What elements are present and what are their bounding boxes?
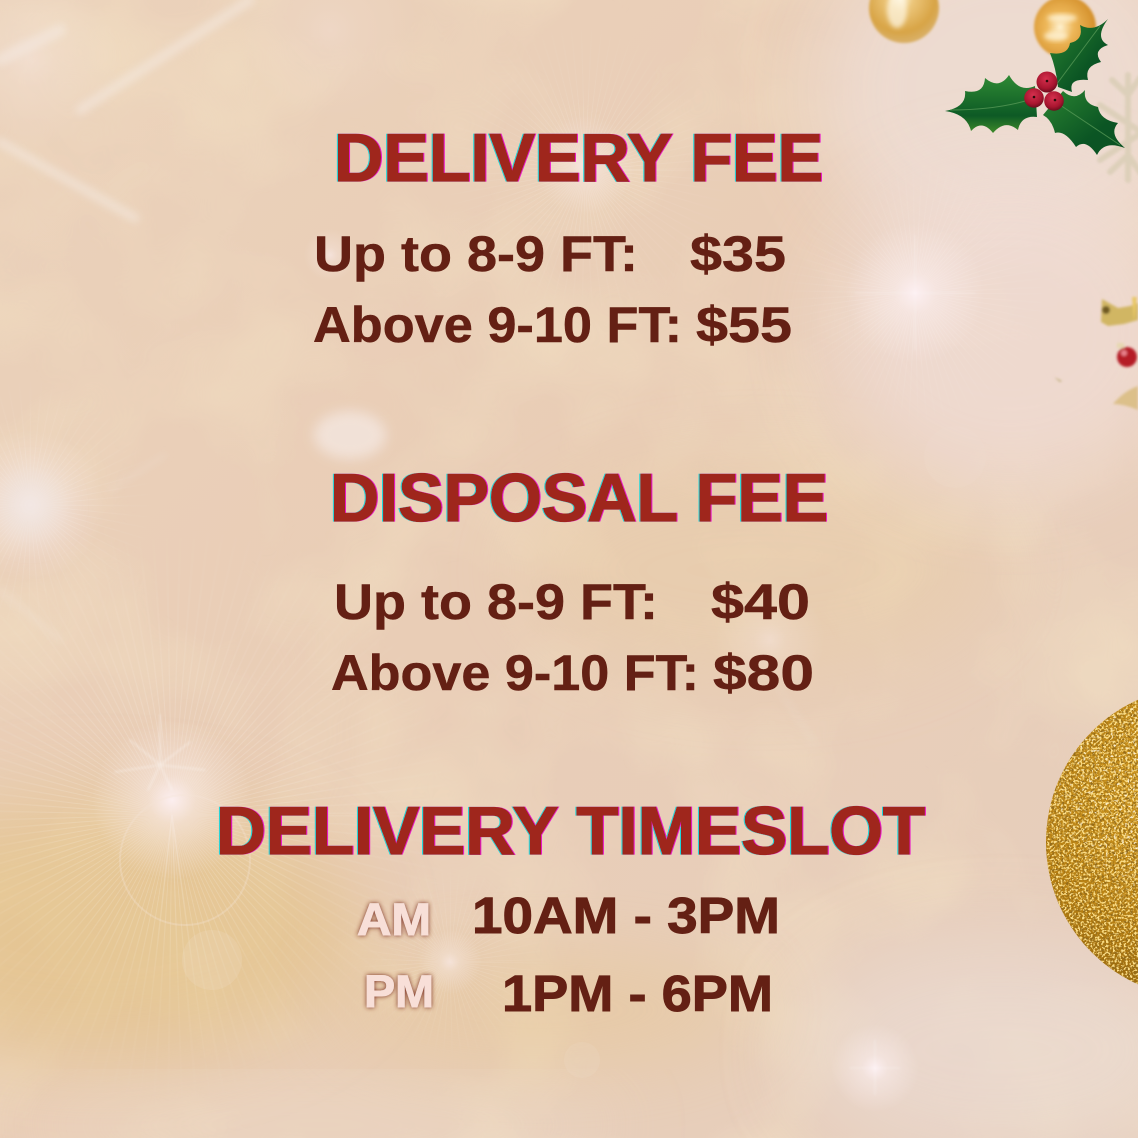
text block: disposal fee rates: Up to 8-9 FT:: [334, 574, 658, 630]
decoration: red bauble: [1117, 343, 1137, 367]
left leaf: [945, 75, 1037, 133]
text block: AM timeslot: AM: [357, 894, 431, 945]
star streaks: [115, 235, 975, 1095]
text block: delivery fee rates: $55: [696, 297, 792, 353]
text block: PM timeslot: PM: [364, 966, 434, 1017]
text block: disposal fee rates: [331, 574, 814, 701]
top leaf: [1050, 19, 1108, 92]
text block: delivery fee rates: Up to 8-9 FT:: [314, 226, 638, 282]
decoration: cream ornament fragment: [1054, 377, 1138, 410]
decoration: gold bauble behind holly: [1034, 0, 1096, 58]
text block: delivery fee rates: $35: [690, 226, 786, 282]
heading: delivery timeslot: DELIVERY TIMESLOT: [216, 793, 925, 869]
decoration: faded snowflake: [1100, 75, 1138, 180]
text block: AM timeslot: 10AM - 3PM: [472, 887, 780, 944]
right leaf: [1043, 90, 1125, 155]
decoration: gold bauble top: [869, 0, 939, 43]
heading: delivery fee: DELIVERY FEE: [334, 120, 823, 196]
ray bursts: [22, 665, 322, 965]
berries: [1036, 72, 1058, 92]
text block: delivery fee rates: Above 9-10 FT:: [313, 297, 682, 353]
icon: holly sprig with berries: [945, 19, 1125, 155]
heading: disposal fee: DISPOSAL FEE: [330, 460, 828, 536]
text block: PM timeslot: [364, 965, 773, 1022]
text block: AM timeslot: [357, 887, 780, 945]
glows: [92, 720, 252, 880]
lens rings: [120, 795, 250, 925]
text block: delivery fee rates: [313, 226, 792, 353]
text block: disposal fee rates: $80: [713, 645, 814, 701]
text block: disposal fee rates: Above 9-10 FT:: [331, 645, 699, 701]
text block: PM timeslot: 1PM - 6PM: [502, 965, 773, 1022]
text block: disposal fee rates: $40: [711, 574, 810, 630]
decoration: golden bell: [1101, 297, 1138, 326]
icon: gold glitter bauble: [1046, 686, 1138, 998]
